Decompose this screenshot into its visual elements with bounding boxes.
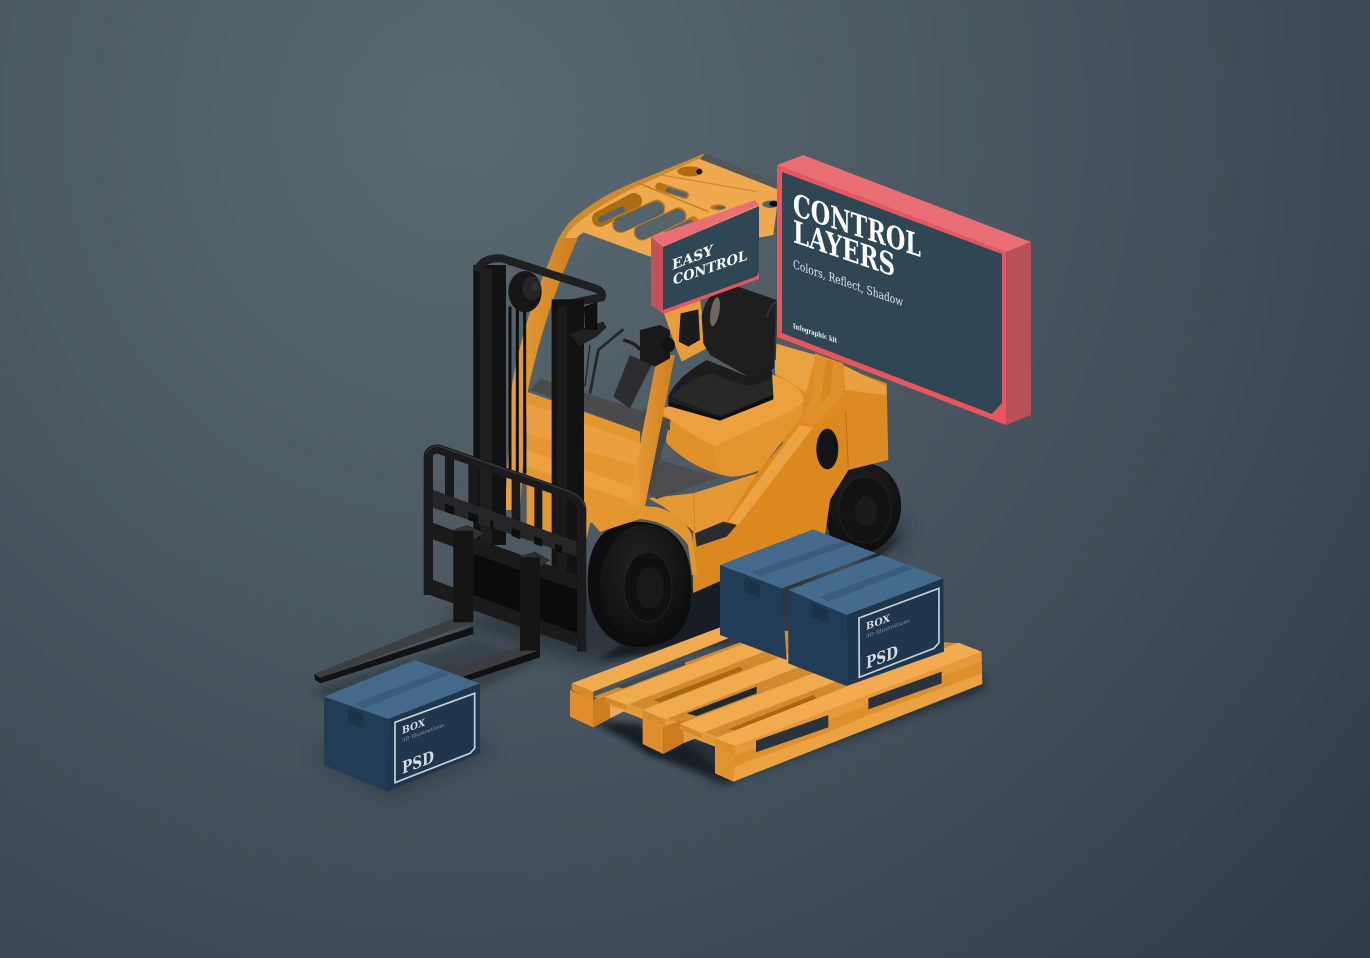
rear pillar — [802, 353, 843, 425]
lower bar — [425, 580, 577, 647]
pallet — [570, 627, 982, 782]
left block — [570, 690, 627, 727]
left box label text — [402, 717, 444, 779]
left box — [324, 660, 480, 792]
main side panel — [693, 412, 848, 593]
box label border — [859, 588, 939, 677]
side trim — [643, 408, 671, 493]
boards — [572, 627, 847, 733]
carriage plate — [425, 520, 577, 590]
front box — [788, 555, 944, 686]
right mast rail — [552, 299, 584, 636]
front stringer side — [715, 653, 982, 782]
gray deck plate — [531, 378, 670, 432]
circular vent hole — [816, 429, 838, 469]
right box label text — [866, 612, 910, 674]
gray dash column — [613, 355, 652, 408]
openings showing floor — [615, 660, 685, 688]
floor plate — [648, 460, 718, 499]
seat — [668, 285, 777, 421]
top crossbar — [477, 258, 602, 304]
orange front panel — [527, 392, 640, 538]
rear seat pillar — [663, 300, 707, 362]
box heading: BOX — [866, 612, 890, 633]
middle block — [643, 717, 700, 754]
heading line 2: LAYERS — [793, 213, 895, 284]
right fork shank — [520, 552, 550, 651]
stringer top plank — [715, 643, 982, 746]
subtitle: Colors, Reflect, Shadow — [793, 257, 903, 310]
right stacked boxes — [720, 529, 944, 686]
deck under sign — [775, 343, 816, 393]
dash and front panel — [527, 329, 670, 538]
mast bracket — [570, 322, 607, 346]
rear wheel — [819, 458, 907, 558]
stringer lower rail — [733, 673, 982, 782]
steering column — [590, 329, 623, 393]
left fork — [314, 619, 470, 678]
forks — [314, 619, 540, 683]
hatch highlight stripe — [728, 425, 813, 525]
mast — [473, 258, 607, 636]
heading line 1: CONTROL — [793, 186, 921, 265]
cab body — [643, 300, 888, 593]
stringer gaps — [756, 715, 828, 752]
board edges — [572, 683, 702, 738]
rear counterweight block — [773, 343, 888, 537]
front wheel — [588, 522, 691, 647]
floor shadows — [312, 520, 985, 796]
lower panel — [648, 473, 757, 533]
lift chains — [510, 307, 525, 473]
overhead guard roof — [544, 153, 779, 288]
right fork — [450, 645, 539, 677]
box heading: BOX — [402, 717, 425, 737]
lower deck — [593, 630, 982, 750]
left mast rail — [473, 265, 506, 545]
front pillar and mirrors — [628, 309, 700, 507]
back box — [720, 529, 877, 660]
lower backrest notches — [445, 503, 562, 553]
large sign: control layers — [777, 155, 1031, 425]
left fork shank — [453, 525, 483, 622]
front fender — [590, 505, 697, 575]
front corner block — [715, 747, 735, 782]
backrest frame — [428, 449, 582, 652]
forklift — [314, 153, 907, 683]
lever — [585, 345, 590, 387]
sign text line 2: CONTROL — [673, 247, 747, 289]
box subtitle: 3D Illustrations — [866, 618, 910, 640]
side step — [695, 522, 737, 547]
pulley — [508, 271, 542, 312]
box psd: PSD — [866, 643, 898, 674]
footer: Infographic kit — [793, 321, 837, 345]
load backrest and carriage — [425, 446, 585, 652]
rear view mirror — [679, 309, 700, 347]
box label border — [395, 693, 475, 783]
dark carriage core — [473, 553, 580, 640]
backrest bars — [445, 453, 562, 552]
mirror box — [640, 325, 670, 367]
cross boards — [593, 695, 730, 747]
seat pedestal hood — [662, 375, 804, 477]
sign text line 1: EASY — [672, 242, 714, 274]
mid cross bar — [425, 490, 577, 557]
left overhead pillar — [505, 238, 578, 510]
small sign: easy control — [651, 200, 759, 314]
box psd: PSD — [402, 748, 434, 779]
box subtitle: 3D Illustrations — [402, 722, 444, 744]
